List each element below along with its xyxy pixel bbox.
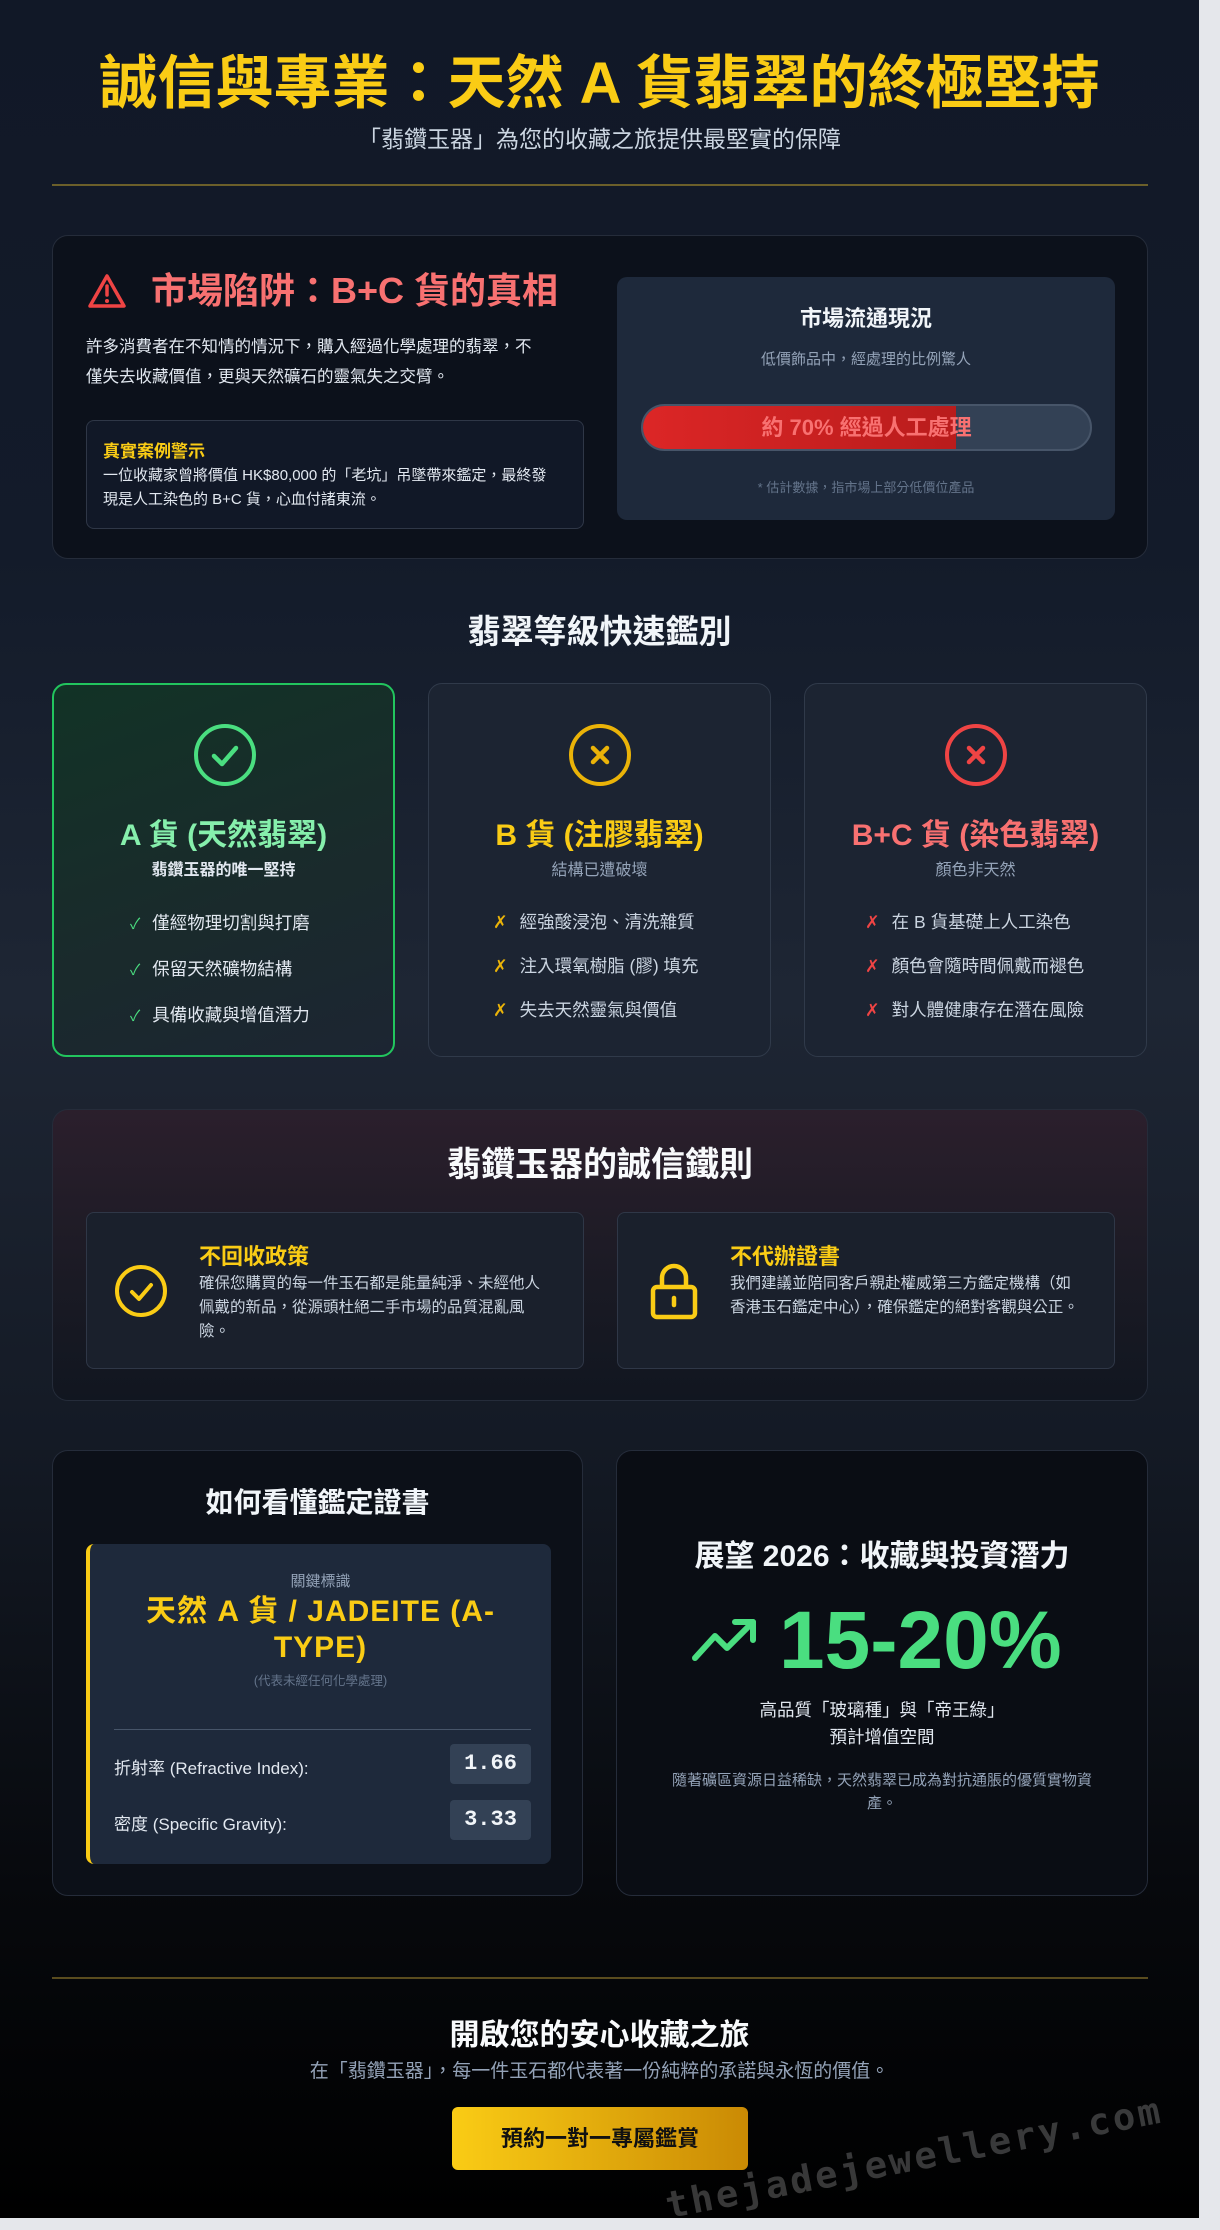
row: refractive index: 1.66 (464, 1751, 517, 1776)
box: no certificate proxy: 不代辦證書 (730, 1244, 840, 1269)
list: B grade issues: ✗ 注入環氧樹脂 (膠) 填充 (493, 956, 699, 976)
card: B grade: B 貨 (注膠翡翠) (495, 819, 704, 852)
button: book appointment: 預約一對一專屬鑑賞 (501, 2126, 699, 2151)
panel: outlook 2026: 預計增值空間 (830, 1727, 934, 1747)
row: refractive index (114, 1744, 531, 1784)
row: specific gravity: 3.33 (464, 1807, 517, 1832)
box: no buyback: 不回收政策 (199, 1244, 309, 1269)
heading: certificate guide: 如何看懂鑑定證書 (205, 1487, 430, 1518)
certificate card: 天然 A 貨 / JADEITE (A-TYPE) (146, 1595, 495, 1664)
button: book appointment (452, 2107, 748, 2170)
list: B grade issues: ✗ 失去天然靈氣與價值 (493, 1000, 677, 1020)
card: B+C grade: 顏色非天然 (935, 862, 1016, 879)
panel: outlook 2026: 高品質「玻璃種」與「帝王綠」 (760, 1700, 1004, 1720)
bar chart: 70% treated: 約 70% 經過人工處理 (761, 415, 972, 440)
list: A grade features: ✓ 具備收藏與增值潛力 (130, 1005, 310, 1025)
heading: outlook: 展望 2026：收藏與投資潛力 (694, 1540, 1070, 1573)
heading: quick grade identification: 翡翠等級快速鑑別 (468, 613, 732, 650)
panel: market stats (617, 277, 1115, 520)
panel: market trap (52, 235, 1148, 559)
card: B grade (428, 683, 771, 1057)
card: A grade (52, 683, 395, 1057)
callout: case warning (86, 420, 584, 529)
certificate card (86, 1544, 551, 1864)
bar chart: 70% treated (641, 404, 1092, 451)
card: A grade: A 貨 (天然翡翠) (120, 819, 327, 852)
row: specific gravity: 密度 (Specific Gravity): (114, 1815, 287, 1834)
card: B+C grade: B+C 貨 (染色翡翠) (852, 819, 1099, 852)
list: B grade issues (493, 912, 699, 1020)
list: A grade features: ✓ 僅經物理切割與打磨 (130, 913, 310, 933)
box: no certificate proxy: 我們建議並陪同客戶親赴權威第三方鑑定機構（如香港玉石鑑定中心），確保鑑定的絕對客觀與公正。 (730, 1275, 1079, 1316)
text: intro: 許多消費者在不知情的情況下，購入經過化學處理的翡翠，不僅失去收藏價值，更與天然礦石的靈氣失之交臂。 (86, 338, 532, 386)
list: B grade issues: ✗ 經強酸浸泡、清洗雜質 (493, 912, 695, 932)
box: no buyback (86, 1212, 584, 1369)
callout: case warning: 真實案例警示 (103, 442, 205, 461)
icon: x circle red (945, 724, 1007, 786)
certificate card: 關鍵標識 (290, 1573, 350, 1590)
panel: market stats: * 估計數據，指市場上部分低價位產品 (758, 480, 974, 495)
panel: integrity rules (52, 1109, 1148, 1401)
list: A grade features (130, 913, 310, 1025)
panel: market stats: 低價飾品中，經處理的比例驚人 (761, 351, 971, 368)
card: B+C grade (804, 683, 1147, 1057)
box: no certificate proxy (617, 1212, 1115, 1369)
list: A grade features: ✓ 保留天然礦物結構 (130, 959, 292, 979)
card: B grade: 結構已遭破壞 (551, 862, 648, 879)
panel: certificate guide (52, 1450, 583, 1896)
card: A grade: 翡鑽玉器的唯一堅持 (151, 862, 296, 879)
icon: trending arrow (692, 1619, 756, 1661)
certificate card: (代表未經任何化學處理) (254, 1674, 387, 1688)
panel: outlook 2026 (616, 1450, 1148, 1896)
icon: check circle gold (115, 1265, 167, 1317)
footer text: 在「翡鑽玉器」，每一件玉石都代表著一份純粹的承諾與永恆的價值。 (310, 2061, 889, 2082)
list: B+C grade issues: ✗ 在 B 貨基礎上人工染色 (865, 912, 1071, 932)
list: B+C grade issues (865, 912, 1084, 1020)
icon: lock (650, 1264, 698, 1320)
footer heading: 開啟您的安心收藏之旅 (450, 2019, 750, 2052)
list: B+C grade issues: ✗ 對人體健康存在潛在風險 (865, 1000, 1084, 1020)
list: B+C grade issues: ✗ 顏色會隨時間佩戴而褪色 (865, 956, 1084, 976)
subtitle: 「翡鑽玉器」為您的收藏之旅提供最堅實的保障 (358, 126, 841, 152)
row: specific gravity (114, 1800, 531, 1840)
heading: market trap: 市場陷阱：B+C 貨的真相 (151, 270, 558, 311)
box: no buyback: 確保您購買的每一件玉石都是能量純淨、未經他人佩戴的新品，從源頭杜絕二手市場的品質混亂風險。 (199, 1275, 540, 1340)
heading: integrity rules: 翡鑽玉器的誠信鐵則 (447, 1146, 753, 1184)
panel: market stats: 市場流通現況 (800, 306, 932, 331)
panel: outlook 2026: 隨著礦區資源日益稀缺，天然翡翠已成為對抗通脹的優質實物資產。 (672, 1772, 1092, 1812)
callout: case warning: 一位收藏家曾將價值 HK$80,000 的「老坑」吊墜帶來鑑定，最終發現是人工染色的 B+C 貨，心血付諸東流。 (103, 467, 546, 508)
title: 誠信與專業：天然 A 貨翡翠的終極堅持 (100, 51, 1099, 116)
icon: x circle yellow (569, 724, 631, 786)
icon: check circle (194, 724, 256, 786)
stat: 15-20%: 15-20% (779, 1595, 1062, 1686)
row: refractive index: 折射率 (Refractive Index): (114, 1759, 309, 1778)
icon: warning (88, 274, 126, 308)
